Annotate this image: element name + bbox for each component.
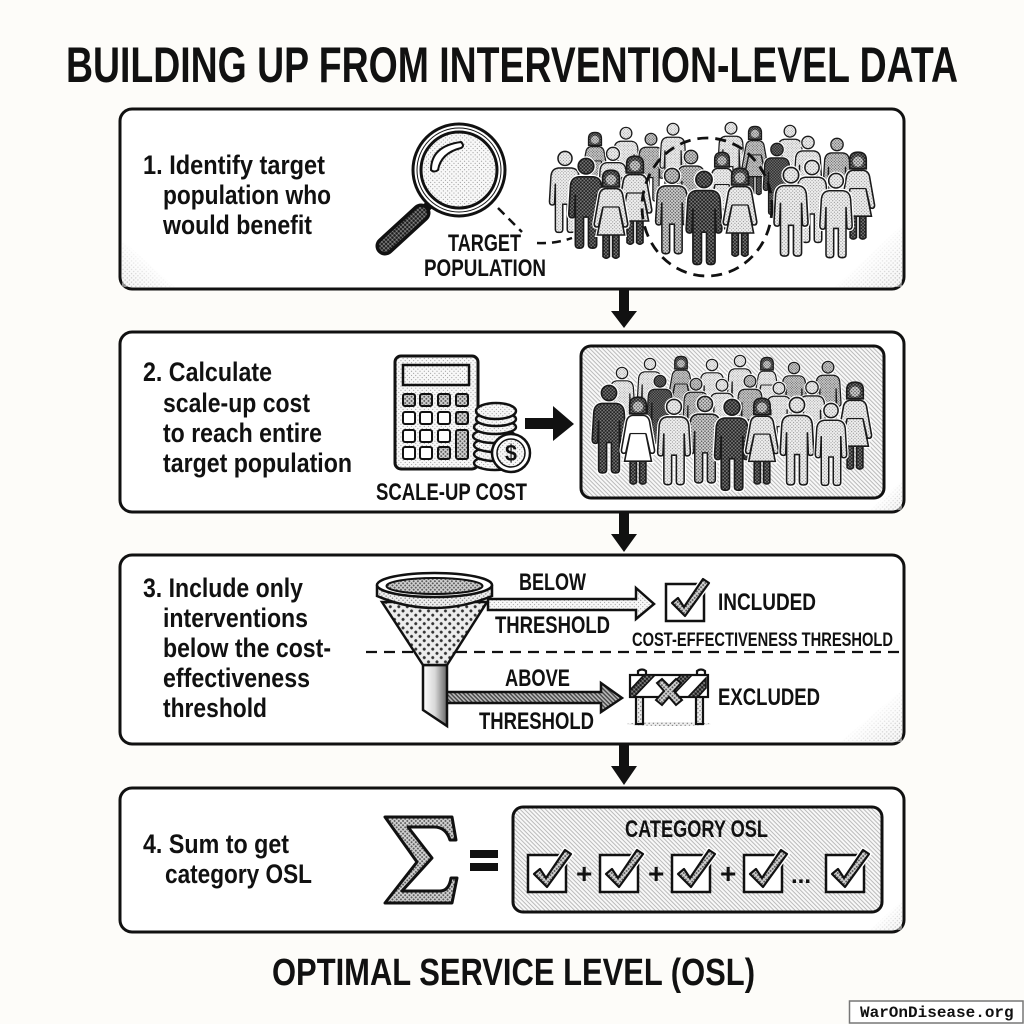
- step 3 text: 3. Include only: [143, 573, 303, 603]
- label: below threshold: THRESHOLD: [495, 612, 610, 639]
- label: above threshold: [479, 665, 594, 735]
- step 3 text: interventions: [163, 603, 308, 633]
- step 4 text: [143, 829, 312, 889]
- label: included: INCLUDED: [718, 589, 816, 616]
- label: cost-effectiveness threshold: COST-EFFECTIVENESS THRESHOLD: [632, 630, 893, 651]
- label: target population: POPULATION: [424, 255, 546, 282]
- panel: step 4 sum to category OSL: [120, 788, 904, 932]
- arrow: step 2 to 3: [611, 513, 637, 552]
- plus signs and ellipsis: ...: [791, 862, 811, 889]
- step 2 text: to reach entire: [163, 418, 322, 448]
- label: scale-up cost: SCALE-UP COST: [376, 479, 527, 506]
- box: entire target population: [581, 346, 884, 498]
- step 3 text: effectiveness: [163, 663, 310, 693]
- label: excluded: EXCLUDED: [718, 684, 820, 711]
- icon: equals: [470, 850, 498, 871]
- icon: barrier with X: [627, 670, 711, 726]
- icon: funnel: [377, 573, 492, 726]
- arrow: step 1 to 2: [611, 290, 637, 328]
- step 3 text: threshold: [163, 693, 267, 723]
- callout line: target population: [498, 208, 572, 243]
- label: category OSL: CATEGORY OSL: [625, 816, 768, 843]
- panel: step 1 identify target population: [120, 109, 904, 289]
- step 2 text: target population: [163, 448, 352, 478]
- plus signs and ellipsis: +: [720, 858, 736, 889]
- plus signs and ellipsis: [576, 858, 811, 889]
- arrow: below threshold: [488, 588, 654, 619]
- step 2 text: 2. Calculate: [143, 357, 272, 387]
- box: category OSL: [513, 807, 882, 912]
- label: target population: [424, 230, 546, 282]
- icon: checkbox included: [666, 579, 709, 621]
- plus signs and ellipsis: +: [648, 858, 664, 889]
- step 2 text: [143, 357, 352, 478]
- step 1 text: population who: [163, 180, 331, 210]
- label: above threshold: THRESHOLD: [479, 708, 594, 735]
- icon: coin stack: [473, 403, 530, 472]
- step 2 text: scale-up cost: [163, 388, 310, 418]
- label: below threshold: BELOW: [519, 569, 586, 596]
- arrow: step 3 to 4: [611, 745, 637, 785]
- icon: magnifying glass: [385, 124, 505, 246]
- label: below threshold: [495, 569, 610, 639]
- threshold dashed line: [366, 651, 900, 653]
- step 3 text: below the cost-: [163, 633, 331, 663]
- label: above threshold: ABOVE: [505, 665, 570, 692]
- crowd of people with highlighted group: [549, 122, 875, 276]
- arrow: above threshold: [445, 683, 622, 712]
- icon: calculator: [395, 356, 478, 469]
- label: target population: TARGET: [448, 230, 521, 257]
- dollar sign: $: [505, 440, 517, 466]
- watermark: WarOnDisease.org: [860, 1004, 1014, 1022]
- step 4 text: category OSL: [165, 859, 312, 889]
- icon: sigma: [385, 817, 457, 903]
- panel: step 2 calculate scale-up cost: [120, 332, 904, 512]
- panel: step 3 include below threshold: [120, 555, 904, 744]
- step 4 text: 4. Sum to get: [143, 829, 289, 859]
- footer title: OPTIMAL SERVICE LEVEL (OSL): [272, 952, 755, 994]
- step 1 text: 1. Identify target: [143, 150, 325, 180]
- step 3 text: [143, 573, 331, 723]
- arrow: cost to population: [525, 406, 574, 441]
- plus signs and ellipsis: +: [576, 858, 592, 889]
- step 1 text: would benefit: [162, 210, 312, 240]
- step 1 text: [143, 150, 331, 240]
